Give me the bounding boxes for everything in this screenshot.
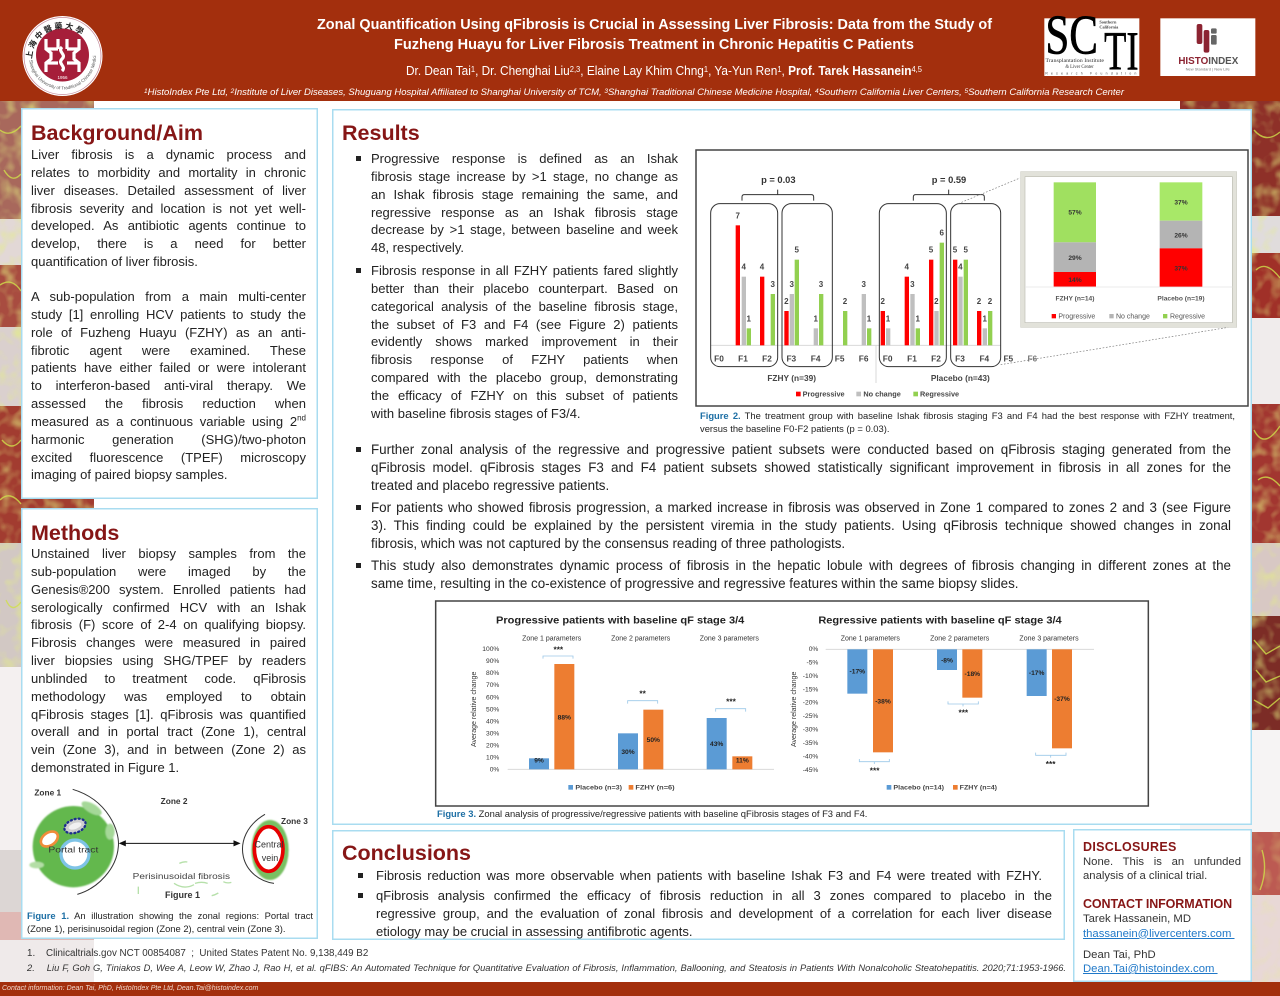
stage axis labels: F6 <box>859 354 869 364</box>
chart: progressive patients: 0% <box>490 766 499 773</box>
bullet: fibrosis response: categorical analysis of the baseline fibrosis stage, <box>371 299 678 314</box>
bar value labels: 3 <box>789 280 794 289</box>
text: methods paragraph: fibrosis (F) score of 2-4 on qualifying biopsy. <box>31 617 306 632</box>
text: methods paragraph: sub-population were imaged by the <box>31 564 306 579</box>
bullet: fibrosis response: fibrosis response of FZHY patients when <box>371 352 678 367</box>
footer band: Contact information: Dean Tai, PhD, HistoIndex Pte Ltd, Dean.Tai@histoindex.com <box>2 985 258 992</box>
title and authors: Zonal Quantification Using qFibrosis is Crucial in Assessing Liver Fibrosis: Data from the Study of <box>317 16 993 33</box>
perisinusoidal fibrosis <box>133 862 231 900</box>
text: methods paragraph: demonstrated in Figure 1. <box>31 760 179 775</box>
figure 2: bar chart of fibrosis response by stage: Placebo (n=43) <box>931 373 990 383</box>
title and authors: Southern California Research Center <box>968 87 1125 98</box>
title and authors: Shanghai Traditional Chinese Medicine Hospital, <box>608 87 815 98</box>
bullet: conclusion 2 <box>358 888 1052 939</box>
figure 2: bar chart of fibrosis response by stage: FZHY (n=39) <box>767 373 816 383</box>
chart: regressive patients: -17% <box>1029 670 1045 677</box>
title and authors: 2 <box>230 88 235 95</box>
bullet: conclusion 1: Fibrosis reduction was more observable when patients with baseline Ishak F3 and F4 were treated with FZHY. <box>376 868 1042 883</box>
title and authors: 4,5 <box>911 65 923 74</box>
text: methods paragraph: vein (Zone 3), and in between (Zone 2) as <box>31 742 306 757</box>
stage axis labels: F1 <box>738 354 748 364</box>
logo: SCTI: TI <box>1104 20 1139 81</box>
bar value labels <box>735 211 993 323</box>
text: disclosures: analysis of a clinical trial. <box>1083 870 1207 882</box>
bullet: fibrosis response <box>356 263 678 421</box>
stage axis labels: F0 <box>714 354 724 364</box>
text: background paragraph 1 <box>31 147 306 269</box>
chart: progressive patients: Zone 2 parameters <box>611 636 671 643</box>
title and authors: 1 <box>471 65 476 74</box>
chart: regressive patients: -38% <box>875 698 891 705</box>
title and authors: 1 <box>144 88 148 95</box>
bar value labels: 3 <box>819 280 824 289</box>
chart: progressive patients: 11% <box>736 758 749 765</box>
bullet: response definition: regressive response as an Ishak fibrosis stage <box>371 205 678 220</box>
chart: regressive patients: Placebo (n=14) <box>893 785 944 792</box>
bullet: fibrosis response: Fibrosis response in all FZHY patients fared slightly <box>371 263 678 278</box>
bar value labels: 1 <box>867 314 872 323</box>
caption: figure 1: Figure 1. An illustration showing the zonal regions: Portal tract <box>27 910 313 921</box>
logo: SCTI: Transplantation Institute <box>1045 59 1104 64</box>
title and authors <box>144 16 1125 98</box>
chart: progressive patients: 9% <box>534 758 544 765</box>
icon: university seal logo: Shanghai University of Traditional Chinese Medicine <box>29 56 96 90</box>
bar value labels: 2 <box>843 297 848 306</box>
central vein zone 3 <box>243 814 308 883</box>
logo: HistoIndex <box>1160 18 1256 76</box>
bars <box>736 225 992 345</box>
central vein zone 3: Central <box>254 840 284 850</box>
bar value labels: 2 <box>934 297 939 306</box>
title and authors: 4 <box>815 88 819 95</box>
text: methods paragraph: methodology was employed to obtain <box>31 689 306 704</box>
bar value labels: 5 <box>929 246 934 255</box>
text: background paragraph 2: excited fluorescence (TPEF) microscopy <box>31 450 306 465</box>
references: 2. Liu F, Goh G, Tiniakos D, Wee A, Leow W, Zhao J, Rao H, et al. qFIBS: An Automated Technique for Quantitative Evaluation of Fibrosis, Inflammation, Ballooning, and Steatosis in Patients With Nonalcoholic Steatohepatitis. 2020;71:1953-1966. <box>27 963 1066 973</box>
legend: Regressive <box>920 390 959 399</box>
logo: HistoIndex: HISTOINDEX <box>1178 56 1238 67</box>
title and authors: 5 <box>964 88 968 95</box>
bullet: conclusion 2: regressive group, and the evaluation of zonal fibrosis and development of a correlation for each liver disease <box>376 906 1052 921</box>
panel: methods <box>21 508 318 939</box>
title and authors: , Dr. Chenghai Liu <box>475 64 570 78</box>
header band <box>0 0 1280 101</box>
stage axis labels: F2 <box>762 354 772 364</box>
double arrow between zones <box>120 841 239 846</box>
central vein zone 3: Zone 3 <box>281 816 308 826</box>
bullet: zonal analysis: Further zonal analysis of the regressive and progressive patient subsets were conducted based on qFibrosis staging generated from the <box>371 442 1231 457</box>
inset: F3/F4 stacked bars <box>1021 172 1237 327</box>
chart: regressive patients: -20% <box>803 700 818 707</box>
stage axis labels: F3 <box>955 354 965 364</box>
figure 1: zonal illustration: Zone 2 <box>161 796 188 806</box>
chart: progressive patients: 43% <box>710 741 723 748</box>
text: background paragraph 2: study [1] enrolling HCV patients to study the <box>31 307 306 322</box>
title and authors: Southern California Liver Centers, <box>819 87 964 98</box>
chart: regressive patients <box>791 615 1094 792</box>
caption: figure 3: Figure 3. Zonal analysis of progressive/regressive patients with baseline qFibrosis stages of F3 and F4. <box>437 808 867 819</box>
stage axis labels: F2 <box>931 354 941 364</box>
inset: F3/F4 stacked bars: Progressive <box>1058 313 1095 320</box>
chart: progressive patients: FZHY (n=6) <box>635 785 675 792</box>
title and authors: , <box>782 64 788 78</box>
bullet: response definition: 48, respectively. <box>371 240 464 255</box>
text: background paragraph 2: patients have either failed or were intolerant <box>31 360 306 375</box>
portal tract zone 1 <box>29 788 118 894</box>
text: methods paragraph: Fibrosis changes were measured in paired <box>31 635 306 650</box>
bullet: response definition: fibrosis stage increase by >1 stage, no change as <box>371 169 678 184</box>
icon: university seal logo: 1956 <box>57 75 68 80</box>
text: background paragraph 2: harmonic generation (SHG)/two-photon <box>31 432 306 447</box>
text: disclosures <box>1083 856 1241 882</box>
chart: regressive patients: *** <box>870 765 880 775</box>
caption: figure 1 <box>27 910 313 934</box>
text: contact names and emails: thassanein@livercenters.com <box>1083 928 1231 940</box>
chart: regressive patients: *** <box>958 708 969 718</box>
chart: progressive patients: Progressive patients with baseline qF stage 3/4 <box>496 615 745 626</box>
stage axis labels: F5 <box>1003 354 1014 364</box>
text: background paragraph 1: relates to morbidity and mortality in chronic <box>31 165 306 180</box>
bullet: dynamic process: This study also demonstrates dynamic process of fibrosis in the hepatic lobule with degrees of fibrosis changing in different zones at the <box>371 558 1231 573</box>
stage axis labels: F4 <box>811 354 821 364</box>
text: methods paragraph: serologically confirmed HCV with an Ishak <box>31 600 306 615</box>
bullet: zonal analysis: qFibrosis model. qFibrosis stages F3 and F4 patient subsets showed statistically significant improvement in fibrosis in all zones for the <box>371 460 1231 475</box>
text: contact names and emails <box>1083 913 1234 975</box>
text: methods paragraph: unblinded to treatment code. qFibrosis <box>31 671 306 686</box>
title and authors: 2,3 <box>570 65 581 74</box>
chart: progressive patients: 10% <box>486 754 499 761</box>
bullet: fibrosis response: evidently shows marked improvement in their <box>371 334 678 349</box>
chart: progressive patients <box>471 615 774 792</box>
bullet: response definition: an Ishak fibrosis stage remaining the same, and <box>371 187 678 202</box>
chart: progressive patients: *** <box>726 696 737 706</box>
bullet: conclusion 2: etiology may be crucial in assessing antifibrotic agents. <box>376 924 692 939</box>
logo: SCTI: & Liver Center <box>1065 65 1094 70</box>
chart: progressive patients: 20% <box>486 742 499 749</box>
bullet: fibrosis progression: For patients who showed fibrosis progression, a marked increase in fibrosis was observed in Zone 1 compared to zones 2 and 3 (see Figure <box>371 500 1231 515</box>
chart: progressive patients: 60% <box>486 694 499 701</box>
inset: F3/F4 stacked bars: 26% <box>1174 232 1188 239</box>
text: methods paragraph: qFibrosis stages [1]. qFibrosis was quantified <box>31 707 306 722</box>
bullet: fibrosis response: the subset of F3 and F4 (see Figure 2) patients <box>371 317 678 332</box>
chart: regressive patients: -37% <box>1054 696 1070 703</box>
text: background paragraph 2: fibrotic agent were examined. These <box>31 343 306 358</box>
title and authors: HistoIndex Pte Ltd, <box>148 87 231 98</box>
bar value labels: 1 <box>813 314 818 323</box>
chart: regressive patients: -35% <box>803 740 818 747</box>
text: methods paragraph: liver biopsies using SHG/TPEF by readers <box>31 653 306 668</box>
chart: regressive patients: Zone 2 parameters <box>930 636 990 643</box>
caption: figure 2: versus the baseline F0-F2 patients (p = 0.03). <box>700 423 889 434</box>
chart: regressive patients: 0% <box>809 646 818 653</box>
title and authors: Institute of Liver Diseases, Shuguang Hospital Affiliated to Shanghai University of TCM, <box>234 87 604 98</box>
title and authors: 1 <box>777 65 782 74</box>
text: background paragraph 1: develop, there is a need for better <box>31 236 306 251</box>
chart: regressive patients: -30% <box>803 727 818 734</box>
bar value labels: 6 <box>939 229 944 238</box>
chart: progressive patients: 88% <box>558 714 571 721</box>
caption: figure 2 <box>700 410 1235 434</box>
chart: progressive patients: Zone 3 parameters <box>700 636 759 643</box>
panel: disclosures and contact: DISCLOSURES <box>1083 840 1177 854</box>
title and authors: Fuzheng Huayu for Liver Fibrosis Treatment in Chronic Hepatitis C Patients <box>394 36 914 53</box>
stage axis labels: F0 <box>883 354 893 364</box>
bar value labels: 5 <box>963 246 968 255</box>
inset: F3/F4 stacked bars: 37% <box>1174 265 1188 272</box>
text: methods paragraph: overall and in portal tract (Zone 1), central <box>31 724 306 739</box>
stage axis labels <box>714 354 1038 364</box>
references <box>27 948 1066 973</box>
chart: regressive patients: FZHY (n=4) <box>960 785 997 792</box>
chart: regressive patients: -17% <box>850 669 865 676</box>
perisinusoidal fibrosis: Perisinusoidal fibrosis <box>133 871 230 881</box>
chart: regressive patients: -5% <box>806 659 818 666</box>
bullet: response definition: Progressive response is defined as an Ishak <box>371 151 678 166</box>
inset: F3/F4 stacked bars: FZHY (n=14) <box>1056 296 1094 303</box>
bullet: fibrosis response: the efficacy of FZHY on this subset of patients <box>371 388 678 403</box>
stage axis labels: F1 <box>907 354 917 364</box>
stage axis labels: F6 <box>1027 354 1038 364</box>
bar value labels: 4 <box>741 263 746 272</box>
chart: regressive patients: Average relative change <box>791 672 798 747</box>
bar value labels: 7 <box>735 211 740 220</box>
text: background paragraph 1: developed. As antibiotic agents continue to <box>31 218 306 233</box>
bullet: response definition <box>356 151 678 255</box>
panel: methods: Methods <box>31 521 119 545</box>
bullet: fibrosis response: compared with the placebo group, demonstrating <box>371 370 678 385</box>
figure 2: bar chart of fibrosis response by stage: p = 0.59 <box>932 175 966 185</box>
text: background paragraph 2: assessed the fibrosis reduction when <box>31 396 306 411</box>
bar value labels: 3 <box>910 280 915 289</box>
title and authors: , Elaine Lay Khim Chng <box>580 64 704 78</box>
references: 1. Clinicaltrials.gov NCT 00854087 ; United States Patent No. 9,138,449 B2 <box>27 948 368 959</box>
bullet: conclusion 2: qFibrosis analysis confirmed the efficacy of fibrosis reduction in all 3 zones compared to placebo in the <box>376 888 1052 903</box>
icon: university seal logo: 上海中醫藥大學 <box>26 22 84 59</box>
chart: progressive patients: Average relative change <box>471 672 478 747</box>
inset: F3/F4 stacked bars: 57% <box>1068 210 1082 217</box>
text: methods paragraph: Genesis®200 system. Enrolled patients had <box>31 582 306 597</box>
chart: regressive patients: Zone 1 parameters <box>841 636 900 643</box>
chart: regressive patients: Zone 3 parameters <box>1019 636 1079 643</box>
bullet: fibrosis response: with baseline fibrosis stages of F3/4. <box>371 406 581 421</box>
chart: progressive patients: ** <box>639 689 647 699</box>
perisinusoidal fibrosis: Figure 1 <box>165 890 200 900</box>
inset: F3/F4 stacked bars: Placebo (n=19) <box>1157 296 1205 303</box>
inset: F3/F4 stacked bars: 29% <box>1068 255 1082 262</box>
caption: figure 2: Figure 2. The treatment group with baseline Ishak fibrosis staging F3 and F4 had the best response with FZHY treatment, <box>700 410 1235 421</box>
chart: progressive patients: 50% <box>647 737 660 744</box>
chart: progressive patients: 90% <box>486 658 499 665</box>
text: background paragraph 1: quantification of liver fibrosis. <box>31 254 198 269</box>
caption: figure 1: (Zone 1), perisinusoidal region (Zone 2), central vein (Zone 3). <box>27 923 285 934</box>
figure 1: zonal illustration <box>28 788 308 900</box>
panel: conclusions <box>332 830 1065 940</box>
title and authors: 1 <box>704 65 709 74</box>
stage axis labels: F5 <box>835 354 845 364</box>
text: background paragraph 2: role of Fuzheng Huayu (FZHY) as an anti- <box>31 325 306 340</box>
panel: background/aim <box>21 108 318 499</box>
text: contact names and emails: Dean Tai, PhD <box>1083 948 1156 960</box>
bar value labels: 4 <box>904 263 909 272</box>
bullet: zonal analysis: treated and placebo regressive patients. <box>371 478 609 493</box>
bar value labels: 1 <box>982 314 987 323</box>
footer band <box>0 982 1280 996</box>
bar value labels: 4 <box>958 263 963 272</box>
panel: conclusions: Conclusions <box>342 841 471 865</box>
legend: No change <box>863 390 901 399</box>
panel: disclosures and contact <box>1073 829 1252 982</box>
inset: F3/F4 stacked bars: Regressive <box>1170 313 1205 320</box>
panel: disclosures and contact: CONTACT INFORMATION <box>1083 897 1232 911</box>
bar value labels: 4 <box>760 263 765 272</box>
bullet: dynamic process: same time, resulting in the co-existence of progressive and regressive features within the same biopsy slides. <box>371 576 1019 591</box>
panel: background/aim: Background/Aim <box>31 121 203 145</box>
legend <box>796 390 959 399</box>
chart: progressive patients: 30% <box>621 749 635 756</box>
bar value labels: 1 <box>886 314 891 323</box>
chart: progressive patients: 100% <box>482 646 499 653</box>
logo: SCTI: SC <box>1045 4 1098 66</box>
inset: F3/F4 stacked bars: 37% <box>1174 199 1188 206</box>
chart: progressive patients: 40% <box>486 718 499 725</box>
chart: progressive patients: 80% <box>486 670 499 677</box>
text: background paragraph 1: liver diseases. Detailed assessment of liver <box>31 183 306 198</box>
title and authors: , Ya-Yun Ren <box>708 64 777 78</box>
bar value labels: 2 <box>977 297 982 306</box>
bullet: zonal analysis <box>356 442 1231 493</box>
bullet: fibrosis progression: 3). This finding could be explained by the persistent viremia in the study patients. Using qFibrosis technique showed changes in zonal <box>371 518 1231 533</box>
bar value labels: 2 <box>880 297 885 306</box>
bar value labels: 2 <box>784 297 789 306</box>
text: contact names and emails: Tarek Hassanein, MD <box>1083 913 1191 925</box>
logo: SCTI: California <box>1099 24 1119 29</box>
title and authors: Dr. Dean Tai <box>406 64 475 78</box>
text: methods paragraph <box>31 546 306 775</box>
bar value labels: 3 <box>861 280 866 289</box>
figure 3: zonal analysis charts <box>434 600 1150 807</box>
zoom connector lines <box>958 178 1228 365</box>
bullet: response definition: decrease by >1 stage, between baseline and week <box>371 222 678 237</box>
bullet: dynamic process <box>356 558 1231 591</box>
chart: regressive patients: Regressive patients with baseline qF stage 3/4 <box>818 615 1062 626</box>
central vein zone 3: vein <box>262 853 278 863</box>
chart: regressive patients: -15% <box>803 686 818 693</box>
text: background paragraph 2: imaging of paired biopsy samples. <box>31 467 228 482</box>
chart: progressive patients: 50% <box>486 706 499 713</box>
chart: regressive patients: *** <box>1046 759 1056 769</box>
bullet: fibrosis progression: fibrosis, which was not captured by the consensus reading of three pathologists. <box>371 536 845 551</box>
chart: regressive patients: -45% <box>803 767 818 774</box>
text: background paragraph 1: Liver fibrosis is a dynamic process and <box>31 147 306 162</box>
bar value labels: 3 <box>770 280 775 289</box>
text: background paragraph 2: measured as a continuous variable using 2nd <box>31 414 306 429</box>
chart: progressive patients: *** <box>553 645 564 655</box>
figure 2: bar chart of fibrosis response by stage <box>695 149 1249 407</box>
chart: progressive patients: 70% <box>486 682 499 689</box>
chart: progressive patients: Placebo (n=3) <box>575 785 622 792</box>
bar value labels: 5 <box>794 246 799 255</box>
portal tract zone 1: Portal tract <box>48 845 99 855</box>
bar value labels: 1 <box>746 314 751 323</box>
chart: regressive patients: -8% <box>941 657 953 664</box>
logo: SCTI: Research Foundation <box>1045 72 1138 76</box>
group outlines and significance brackets <box>711 190 1001 367</box>
logo: SCTI <box>1044 4 1140 81</box>
portal tract zone 1: Zone 1 <box>34 788 62 798</box>
bar value labels: 1 <box>915 314 920 323</box>
bar value labels: 2 <box>988 297 993 306</box>
title and authors: 3 <box>604 88 608 95</box>
figure 2: bar chart of fibrosis response by stage: p = 0.03 <box>761 175 796 185</box>
title and authors: Prof. Tarek Hassanein <box>788 64 911 78</box>
text: contact names and emails: Dean.Tai@histoindex.com <box>1083 963 1214 975</box>
text: background paragraph 2: A sub-population from a main multi-center <box>31 289 306 304</box>
text: disclosures: None. This is an unfunded <box>1083 856 1241 868</box>
panel: results: Results <box>342 121 420 145</box>
stage axis labels: F4 <box>979 354 990 364</box>
chart: progressive patients: Zone 1 parameters <box>522 636 582 643</box>
stage axis labels: F3 <box>786 354 797 364</box>
text: background paragraph 1: fibrosis severity and location is not yet well- <box>31 201 306 216</box>
chart: regressive patients: -10% <box>803 673 818 680</box>
logo: SCTI: Southern <box>1099 20 1117 25</box>
bullet: fibrosis response: better than their placebo counterpart. Based on <box>371 281 678 296</box>
chart: regressive patients: -40% <box>803 753 818 760</box>
chart: regressive patients: -18% <box>965 671 980 678</box>
text: background paragraph 2 <box>31 289 306 482</box>
chart: regressive patients: -25% <box>803 713 818 720</box>
text: background paragraph 2: to interferon-based anti-viral therapy. We <box>31 378 306 393</box>
chart: progressive patients: 30% <box>486 730 499 737</box>
logo: HistoIndex: New Standard | New Life <box>1186 67 1231 72</box>
legend: Progressive <box>803 390 845 399</box>
panel: results <box>332 109 1252 825</box>
inset: F3/F4 stacked bars: No change <box>1116 313 1150 320</box>
inset: F3/F4 stacked bars: 14% <box>1068 277 1082 284</box>
bar value labels: 5 <box>953 246 958 255</box>
text: methods paragraph: Unstained liver biopsy samples from the <box>31 546 306 561</box>
bullet: fibrosis progression <box>356 500 1231 551</box>
